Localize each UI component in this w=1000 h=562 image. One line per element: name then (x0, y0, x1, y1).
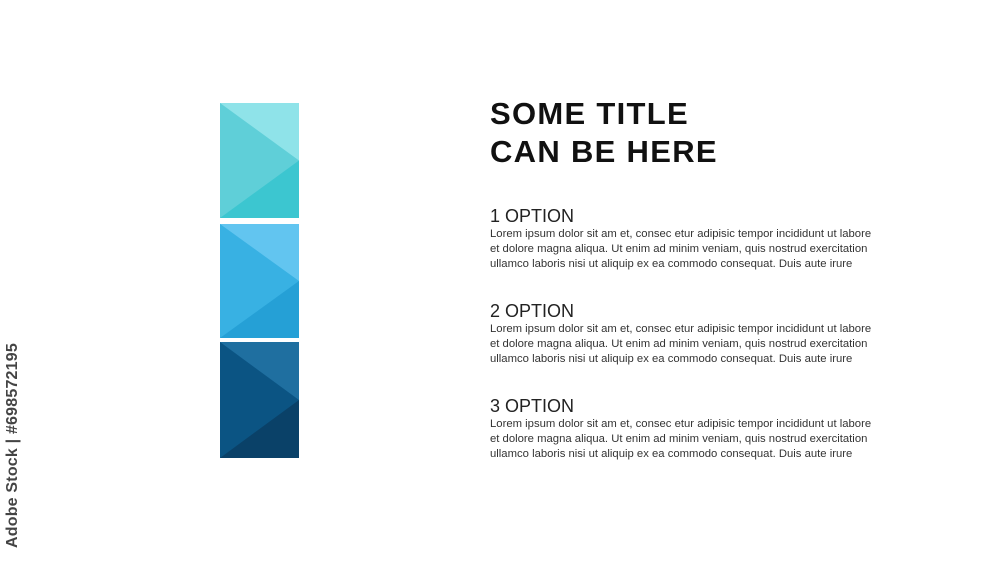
option 3 (490, 396, 871, 460)
option 2: ullamco laboris nisi ut aliquip ex ea commodo consequat. Duis aute irure (490, 353, 852, 365)
title (490, 96, 718, 169)
option 3: et dolore magna aliqua. Ut enim ad minim veniam, quis nostrud exercitation (490, 433, 867, 445)
option 3: ullamco laboris nisi ut aliquip ex ea commodo consequat. Duis aute irure (490, 448, 852, 460)
option 1 (490, 206, 871, 270)
option 1: ullamco laboris nisi ut aliquip ex ea commodo consequat. Duis aute irure (490, 258, 852, 270)
option 3: Lorem ipsum dolor sit am et, consec etur adipisic tempor incididunt ut labore (490, 418, 871, 430)
title: SOME TITLE (490, 96, 689, 131)
graphic: stacked blocks (220, 103, 299, 458)
option 3: 3 OPTION (490, 396, 574, 416)
block 1 (220, 103, 299, 218)
side watermark text: Adobe Stock | #698572195 (4, 343, 21, 548)
option 1: Lorem ipsum dolor sit am et, consec etur adipisic tempor incididunt ut labore (490, 228, 871, 240)
block 2 (220, 224, 299, 338)
option 2: Lorem ipsum dolor sit am et, consec etur adipisic tempor incididunt ut labore (490, 323, 871, 335)
option 1: 1 OPTION (490, 206, 574, 226)
option 2: et dolore magna aliqua. Ut enim ad minim veniam, quis nostrud exercitation (490, 338, 867, 350)
option 1: et dolore magna aliqua. Ut enim ad minim veniam, quis nostrud exercitation (490, 243, 867, 255)
title: CAN BE HERE (490, 134, 718, 169)
option 2 (490, 301, 871, 365)
option 2: 2 OPTION (490, 301, 574, 321)
block 3 (220, 342, 299, 458)
